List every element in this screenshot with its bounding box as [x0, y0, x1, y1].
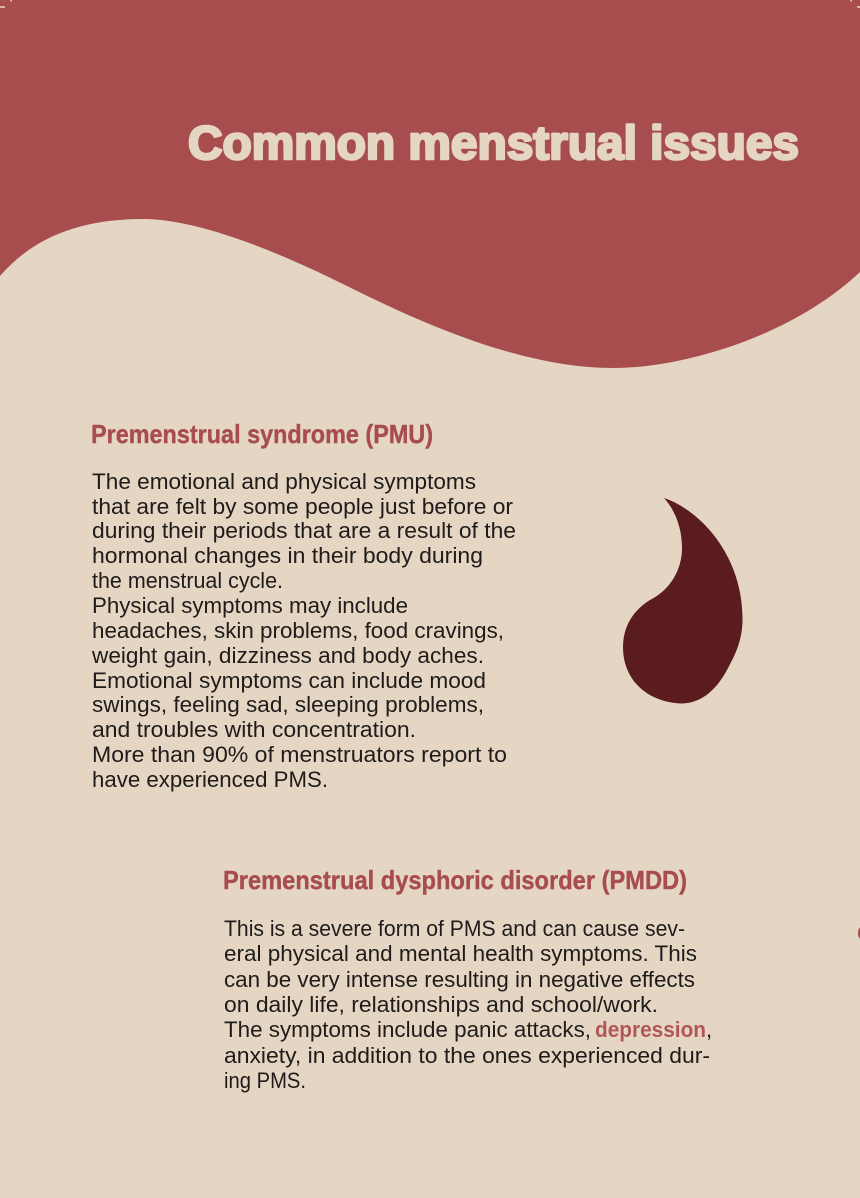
title: Common menstrual issues [188, 116, 799, 169]
text block: premenstrual syndrome description: during their periods that are a result of the [92, 518, 516, 543]
text block: premenstrual syndrome description: weight gain, dizziness and body aches. [91, 643, 484, 668]
heading: premenstrual syndrome: Premenstrual syndrome (PMU) [91, 419, 433, 449]
text block: premenstrual dysphoric disorder description: anxiety, in addition to the ones experienced dur- [224, 1043, 710, 1068]
text block: premenstrual dysphoric disorder description: The symptoms include panic attacks, [224, 1017, 591, 1042]
text block: premenstrual syndrome description: the menstrual cycle. [92, 568, 283, 593]
text block: premenstrual syndrome description: swings, feeling sad, sleeping problems, [92, 692, 484, 717]
text block: premenstrual dysphoric disorder description: eral physical and mental health symptoms. This [224, 941, 697, 966]
top left crop mark [0, 0, 12, 8]
text block: premenstrual dysphoric disorder description: , [706, 1017, 712, 1042]
text block: premenstrual syndrome description: that are felt by some people just before or [92, 494, 513, 519]
heading: premenstrual dysphoric disorder: Premenstrual dysphoric disorder (PMDD) [223, 865, 687, 895]
text block: premenstrual syndrome description: and troubles with concentration. [92, 717, 416, 742]
icon: clipped drop at right edge [858, 927, 860, 939]
text block: premenstrual syndrome description: More than 90% of menstruators report to [92, 742, 507, 767]
text block: premenstrual dysphoric disorder description [224, 916, 712, 1093]
text block: premenstrual dysphoric disorder description: depression [595, 1017, 706, 1042]
text block: premenstrual dysphoric disorder description: This is a severe form of PMS and can cause sev- [224, 916, 685, 941]
text block: premenstrual syndrome description: The emotional and physical symptoms [92, 469, 476, 494]
header wave banner [0, 0, 860, 368]
text block: premenstrual syndrome description: Physical symptoms may include [92, 593, 408, 618]
text block: premenstrual syndrome description [91, 469, 516, 792]
text block: premenstrual dysphoric disorder description: can be very intense resulting in negative effects [224, 967, 695, 992]
top right crop mark [850, 0, 860, 8]
icon: blood drop [623, 498, 743, 704]
text block: premenstrual dysphoric disorder description: ing PMS. [224, 1068, 306, 1093]
text block: premenstrual syndrome description: have experienced PMS. [92, 767, 328, 792]
text block: premenstrual syndrome description: headaches, skin problems, food cravings, [92, 618, 504, 643]
text block: premenstrual syndrome description: hormonal changes in their body during [92, 543, 483, 568]
text block: premenstrual syndrome description: Emotional symptoms can include mood [92, 668, 486, 693]
text block: premenstrual dysphoric disorder description: on daily life, relationships and school/work. [224, 992, 658, 1017]
